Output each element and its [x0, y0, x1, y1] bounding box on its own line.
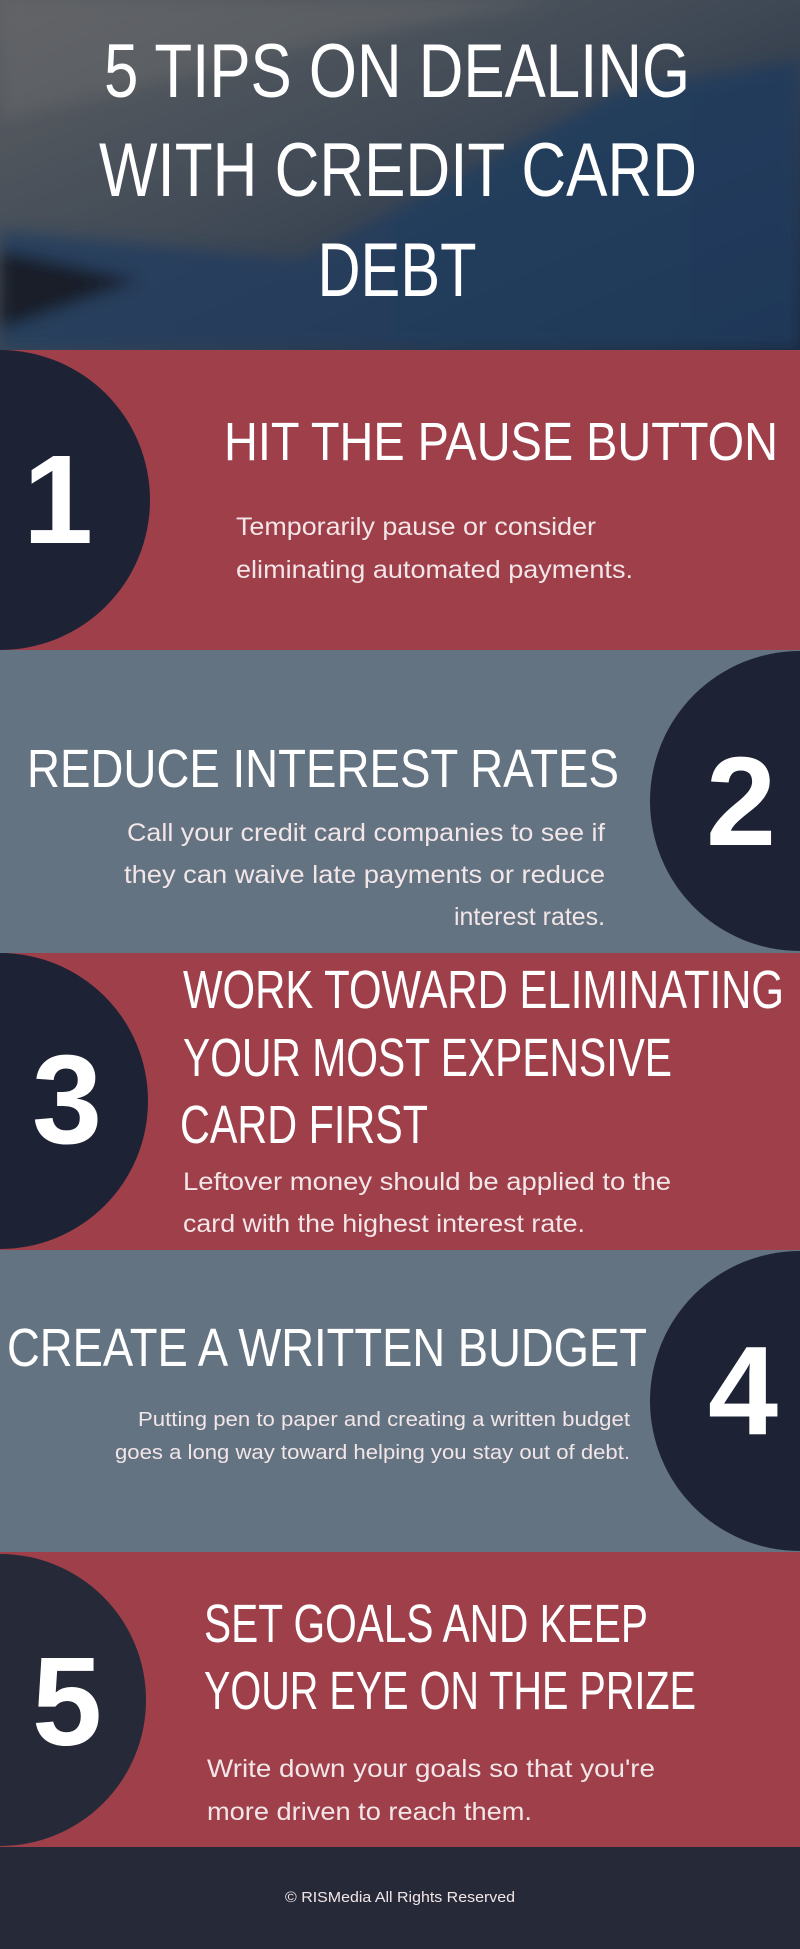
icon: number circle 4: 4	[708, 1320, 778, 1461]
panel: tip 4	[0, 1250, 800, 1552]
title: DEBT	[318, 228, 476, 313]
panel: tip 2	[0, 650, 800, 953]
text: tip 5 body	[207, 1755, 655, 1826]
text: tip 1 body: Temporarily pause or consider	[236, 513, 596, 541]
text: tip 4 body	[115, 1409, 630, 1464]
text: tip 3 body	[183, 1168, 671, 1238]
footer	[0, 1847, 800, 1949]
panel: tip 3	[0, 953, 800, 1250]
icon: number circle 4	[650, 1251, 800, 1551]
heading: tip 3: CARD FIRST	[180, 1095, 428, 1155]
heading: tip 3	[180, 960, 784, 1155]
icon: number circle 5: 5	[32, 1631, 102, 1772]
text: tip 2 body: Call your credit card companies to see if	[127, 819, 605, 847]
heading: tip 2: REDUCE INTEREST RATES	[27, 739, 619, 799]
icon: number circle 3: 3	[32, 1029, 102, 1170]
text: tip 4 body: Putting pen to paper and creating a written budget	[138, 1409, 630, 1431]
icon: number circle 2: 2	[706, 731, 776, 872]
heading: tip 5	[204, 1594, 696, 1721]
title	[99, 29, 697, 313]
icon: number circle 3	[0, 953, 148, 1249]
text: tip 4 body: goes a long way toward helping you stay out of debt.	[115, 1442, 630, 1464]
header: photo background with title	[0, 0, 800, 350]
text: tip 1 body	[236, 513, 633, 584]
panel: tip 5	[0, 1552, 800, 1847]
heading: tip 4: CREATE A WRITTEN BUDGET	[7, 1318, 647, 1378]
text: tip 3 body: Leftover money should be applied to the	[183, 1168, 671, 1196]
text: tip 5 body: Write down your goals so that you're	[207, 1755, 655, 1783]
text: tip 2 body: they can waive late payments or reduce	[124, 861, 605, 889]
text: tip 1 body: eliminating automated payments.	[236, 556, 633, 584]
panel: tip 1	[0, 350, 800, 650]
heading: tip 5: SET GOALS AND KEEP	[204, 1594, 648, 1654]
text: tip 2 body	[124, 819, 605, 931]
text: tip 5 body: more driven to reach them.	[207, 1798, 532, 1826]
icon: number circle 5	[0, 1554, 146, 1846]
text: tip 2 body: interest rates.	[454, 903, 605, 931]
footer: © RISMedia All Rights Reserved	[285, 1889, 515, 1906]
icon: number circle 1: 1	[23, 429, 93, 570]
text: tip 3 body: card with the highest interest rate.	[183, 1210, 585, 1238]
icon: number circle 2	[650, 651, 800, 951]
icon: number circle 1	[0, 350, 150, 650]
